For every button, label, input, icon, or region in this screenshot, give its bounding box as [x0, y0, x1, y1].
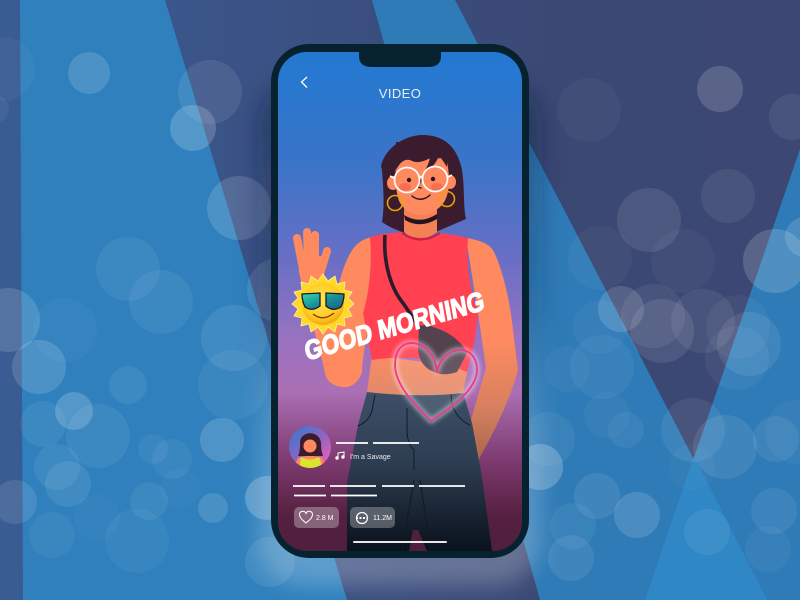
- jeans seams: [358, 394, 470, 524]
- earrings: [388, 192, 454, 210]
- like count: 2.8 M: [316, 515, 334, 522]
- ears: [387, 175, 456, 190]
- right arm: [468, 238, 518, 460]
- phone halo: [258, 80, 542, 585]
- raised arm: [298, 256, 366, 387]
- screen: [278, 52, 522, 551]
- back arrow: [302, 77, 307, 88]
- raised hand fingers: [297, 232, 327, 274]
- song name: I'm a Savage: [350, 454, 391, 461]
- sun smile: [313, 313, 334, 318]
- eyes: [407, 177, 435, 182]
- sun face: [302, 283, 344, 325]
- fringe: [396, 142, 447, 172]
- good morning lettering: GOOD MORNING: [302, 285, 486, 367]
- collar: [402, 233, 440, 240]
- midriff: [367, 355, 468, 395]
- choker: [404, 214, 437, 224]
- sunglasses: [302, 293, 344, 309]
- face: [395, 158, 449, 215]
- sun sticker: [292, 274, 354, 334]
- comment count: 11.2M: [373, 515, 392, 522]
- avatar: [289, 426, 331, 470]
- home indicator: [353, 541, 447, 543]
- music note icon: [336, 452, 344, 459]
- nose and smile: [412, 180, 430, 199]
- heart icon: [300, 511, 312, 523]
- red top: [363, 232, 478, 372]
- bag strap: [385, 235, 420, 328]
- phone body: [271, 44, 529, 558]
- notch: [359, 50, 441, 67]
- like button: [294, 507, 339, 528]
- sun rays: [292, 274, 354, 334]
- back hair: [381, 135, 466, 233]
- glasses: [390, 166, 452, 192]
- upper left arm: [339, 238, 371, 362]
- comment button: [350, 507, 395, 528]
- phone: [271, 44, 529, 558]
- post author lines: [336, 442, 419, 444]
- character: [297, 135, 518, 551]
- neck: [404, 205, 437, 238]
- caption lines: [293, 486, 465, 496]
- blush: [399, 183, 443, 191]
- jeans: [347, 392, 492, 551]
- heart outline: [395, 343, 477, 421]
- title: VIDEO: VIDEO: [379, 86, 421, 101]
- heart glow: [395, 343, 477, 421]
- comment icon: [356, 512, 368, 524]
- heart sticker: [395, 343, 477, 421]
- bag: [418, 325, 467, 374]
